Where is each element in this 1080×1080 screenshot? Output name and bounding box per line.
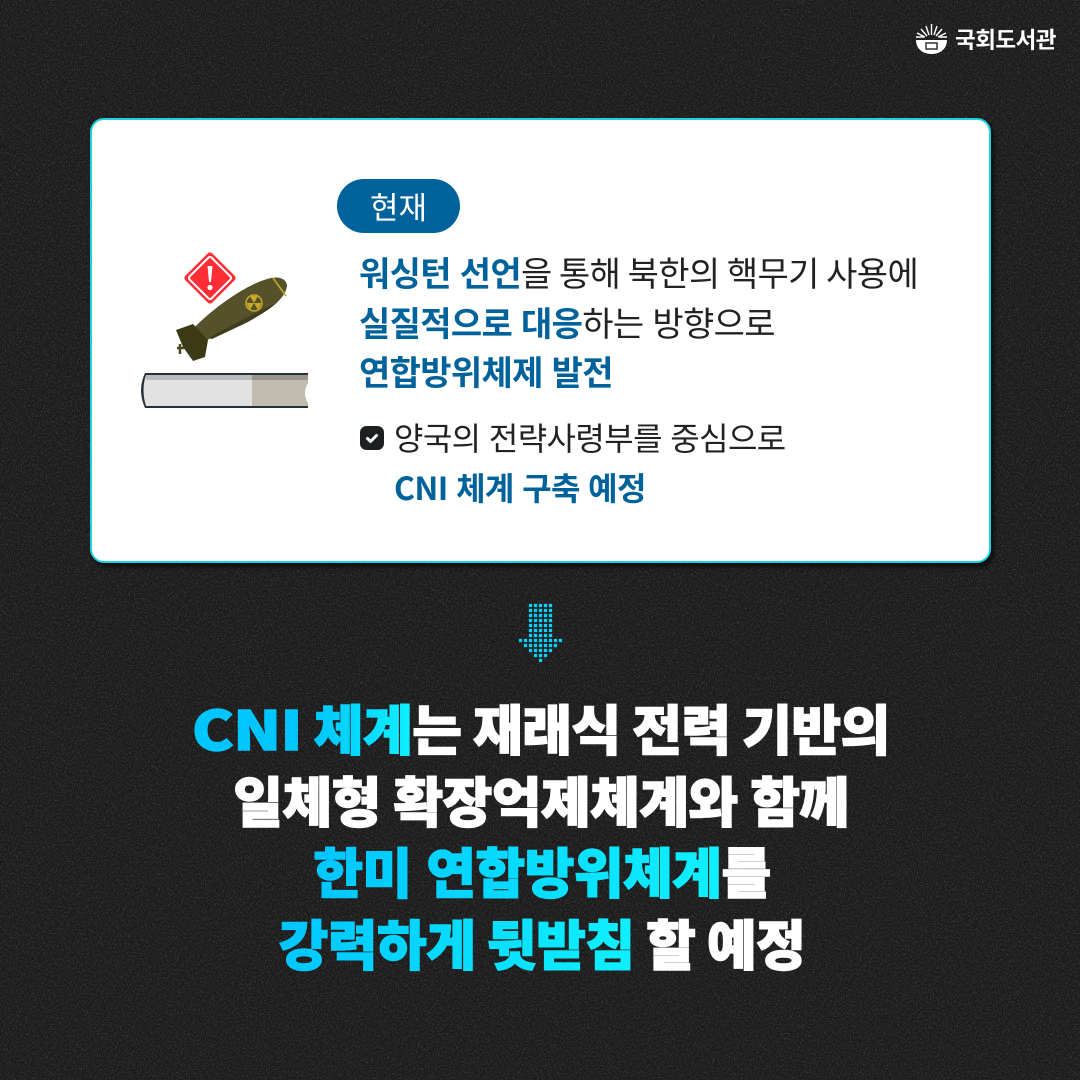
headline: [192, 687, 890, 981]
icon: book: [141, 373, 308, 408]
panel: current status: [90, 118, 991, 563]
text block: detail: 양국의 전략사령부를 중심으로: [394, 414, 786, 460]
text block: main description: 연합방위체제 발전: [359, 346, 613, 395]
text block: detail: [394, 414, 786, 510]
text block: main description: [359, 247, 918, 395]
badge: 현재: [337, 179, 460, 233]
text block: main description: 실질적으로 대응하는 방향으로: [359, 296, 775, 346]
headline: 일체형 확장억제체계와 함께: [233, 759, 849, 838]
headline: 한미 연합방위체계를: [313, 830, 771, 909]
badge: 현재: 현재: [370, 183, 427, 228]
logo text: 국회도서관: [955, 23, 1056, 55]
illustration: warning sign, bomb and book: [141, 252, 308, 408]
headline: 체계는 재래식 전력 기반의: [314, 687, 890, 766]
text block: detail: CNI 체계 구축 예정: [394, 464, 646, 510]
icon: library emblem: [916, 24, 947, 54]
icon: nuclear bomb: [176, 277, 287, 361]
icon: check box: [360, 426, 384, 450]
headline: CNI: [192, 687, 302, 766]
arrow: dotted down arrow: [518, 604, 562, 662]
text block: main description: 워싱턴 선언을 통해 북한의 핵무기 사용에: [359, 247, 918, 296]
icon: warning diamond: [183, 251, 237, 305]
headline: 강력하게 뒷받침 할 예정: [279, 902, 805, 981]
logo: National Assembly Library: [916, 23, 1056, 55]
